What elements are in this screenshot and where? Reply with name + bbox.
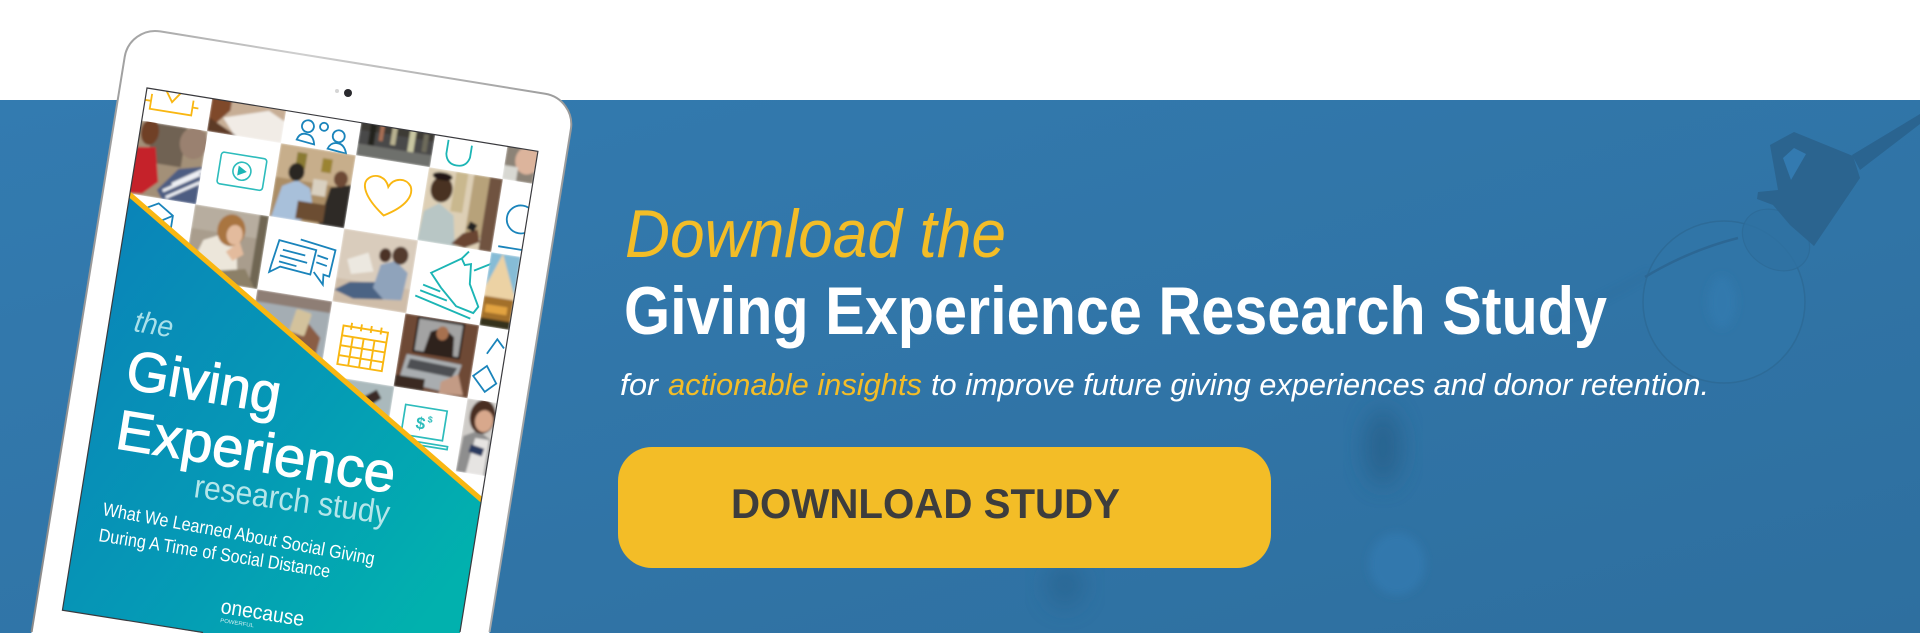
subheading: for — [620, 367, 660, 402]
download button — [618, 447, 1271, 568]
photo: woman on laptop video call — [394, 313, 480, 398]
icon: blue circle — [498, 204, 528, 251]
cover: research study: research study — [192, 467, 393, 531]
photo: man holding phone — [256, 289, 332, 359]
icon: laptop dollar: $ — [427, 414, 433, 425]
photo: woman with credit card — [456, 398, 496, 476]
photo: woman smiling on laptop — [188, 204, 269, 290]
icon: video player — [217, 152, 267, 191]
cover: Giving: Giving — [122, 338, 286, 426]
icon: laptop dollar: $ — [414, 413, 427, 434]
icon: heart — [364, 175, 412, 217]
download button: DOWNLOAD STUDY — [731, 480, 1120, 527]
photo: carousel — [480, 252, 520, 330]
icon: sneaker — [414, 250, 492, 320]
photo: hands and paper — [207, 99, 286, 143]
cover: logo tagline: POWERFUL — [220, 618, 254, 629]
heading: Download the: Download the — [625, 196, 1006, 272]
tablet — [31, 31, 571, 633]
subheading: actionable insights — [668, 367, 922, 402]
icon: blue tool — [471, 336, 505, 394]
photo: light bulb — [346, 378, 394, 416]
photo: couple on floor — [332, 228, 418, 314]
icon: envelope — [148, 202, 174, 228]
icon: laptop dollar — [401, 404, 448, 451]
cover panel — [62, 195, 481, 633]
tablet body — [31, 31, 571, 633]
cover: subtitle line 1: What We Learned About Social Giving — [101, 498, 377, 569]
photo: cyclists — [356, 123, 436, 168]
cover: the: the — [132, 305, 176, 344]
cover: onecause logo: onecause — [219, 595, 306, 631]
cover: Experience: Experience — [112, 398, 401, 505]
photo: restaurant conversation — [130, 120, 208, 204]
background: light bulb photo — [1047, 114, 1920, 607]
gold diagonal stripe — [129, 192, 482, 503]
photo: top right person — [502, 147, 538, 184]
cover text — [97, 305, 401, 631]
icon: teal shape — [445, 140, 472, 167]
photo: dinner table — [269, 143, 356, 228]
icon: calendar — [337, 322, 389, 371]
camera — [335, 89, 352, 97]
icon: people — [296, 119, 350, 154]
icon: ticket — [146, 92, 198, 116]
tablet screen tiles — [130, 92, 538, 476]
screen border — [62, 88, 538, 632]
heading: Giving Experience Research Study: Giving Experience Research Study — [624, 273, 1607, 349]
photo: excited man with phone — [417, 167, 503, 252]
subheading: to improve future giving experiences and donor retention. — [931, 367, 1709, 402]
tablet edge — [32, 31, 571, 632]
icon: chat bubbles — [269, 235, 336, 286]
cover: subtitle line 2: During A Time of Social Distance — [97, 524, 332, 582]
